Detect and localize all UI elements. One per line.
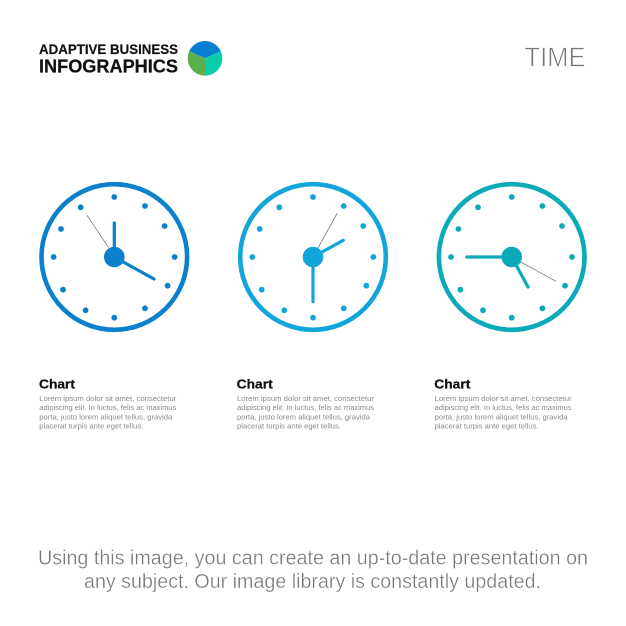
title: INFOGRAPHICS [39,56,178,76]
text block: chart 2: placerat turpis ante eget tellus. [237,422,341,431]
title [39,41,178,76]
title: ADAPTIVE BUSINESS [39,41,178,57]
text block: chart 3: Lorem ipsum dolor sit amet, consectetur [435,394,572,403]
text block: chart 3 [434,376,572,431]
text block: chart 1 [39,376,177,431]
text block: chart 1: porta, justo lorem aliquet tellus, gravida [39,412,173,421]
clock 2 [240,184,386,330]
clock 3 [439,184,584,330]
text block: chart 3: porta, justo lorem aliquet tellus, gravida [435,412,568,421]
text block: chart 3: Chart [434,376,471,392]
text block: chart 3: adipiscing elit. In luctus, felis ac maximus [435,403,572,412]
text block: chart 1: adipiscing elit. In luctus, felis ac maximus [39,403,176,412]
text block: chart 1: Chart [39,376,76,392]
text block: chart 2: Lorem ipsum dolor sit amet, consectetur [237,394,374,403]
text block: chart 2: porta, justo lorem aliquet tellus, gravida [237,412,371,421]
text block: chart 1: placerat turpis ante eget tellus. [39,422,143,431]
clock 1 [42,184,187,330]
text block: chart 2 [237,376,374,431]
text block: chart 2: adipiscing elit. In luctus, felis ac maximus [237,403,374,412]
text block: chart 2: Chart [237,376,273,392]
heading: TIME: TIME [524,42,586,73]
footer text: any subject. Our image library is constantly updated. [84,570,541,593]
text block: chart 1: Lorem ipsum dolor sit amet, consectetur [39,394,177,403]
footer text [38,546,588,593]
icon: logo pie [188,41,222,76]
text block: chart 3: placerat turpis ante eget tellus. [435,422,539,431]
footer text: Using this image, you can create an up-to-date presentation on [38,546,588,570]
